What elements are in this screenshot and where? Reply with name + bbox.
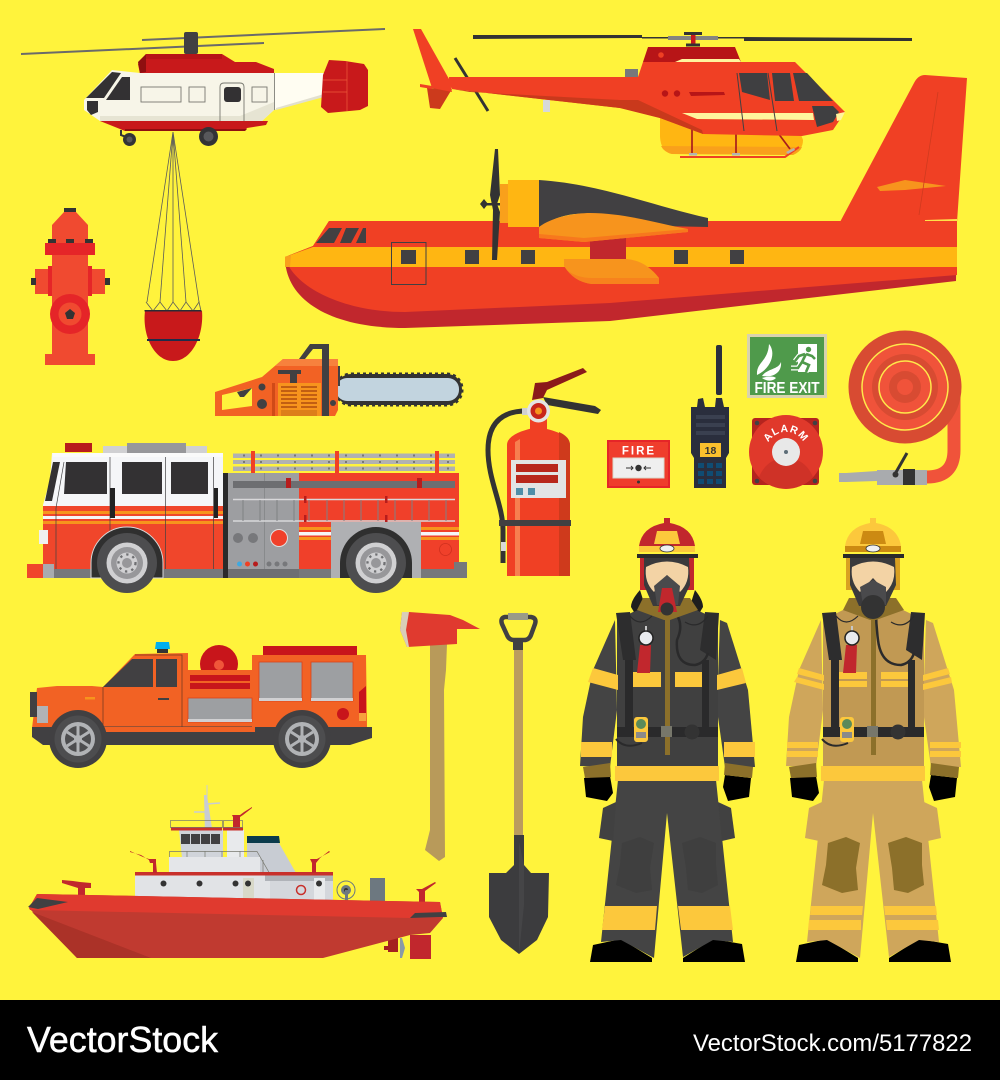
- truck rear wheel: [340, 527, 412, 593]
- fire exit sign: [747, 334, 827, 398]
- footer bar: [0, 1000, 1000, 1080]
- head and helmet: [843, 518, 904, 620]
- trousers: [599, 780, 735, 958]
- truck front wheel: [91, 527, 163, 593]
- jacket: [580, 610, 755, 781]
- icon: fire hydrant: [31, 208, 110, 365]
- icon: water bomber plane: [285, 75, 967, 328]
- sign text: FIRE EXIT: [754, 380, 820, 397]
- tail fin: [413, 29, 488, 111]
- plane hull: [285, 221, 957, 328]
- icon: pickup fire truck: [30, 642, 372, 768]
- icon: exit door and running man: [791, 344, 817, 372]
- pickup front wheel: [49, 710, 107, 768]
- icon: walkie talkie radio: [691, 345, 729, 488]
- helicopter fuselage: [84, 54, 368, 131]
- gloves: [584, 775, 751, 801]
- icon: orange helicopter: [413, 29, 912, 157]
- firefighter in tan suit with yellow helmet: [786, 518, 961, 962]
- main rotor: [473, 32, 912, 46]
- icon: leaves: [757, 344, 781, 381]
- boat rudder and propeller: [384, 935, 431, 959]
- truck cab: [27, 443, 223, 578]
- water bucket on cables: [144, 132, 202, 361]
- extinguisher hose: [488, 411, 526, 563]
- footer url: VectorStock.com/5177822: [693, 1030, 972, 1057]
- icon: white rescue helicopter with bucket line: [21, 28, 385, 361]
- pickup rear wheel: [273, 710, 331, 768]
- icon: fire engine truck: [27, 443, 467, 593]
- hose coil: [848, 330, 962, 444]
- icon: fire extinguisher: [488, 368, 601, 576]
- footer logo: VectorStock: [27, 1019, 219, 1060]
- boots: [590, 939, 745, 962]
- plane engine and wing: [500, 180, 708, 284]
- plane tail: [840, 75, 967, 222]
- icon: fire axe: [400, 612, 480, 861]
- boat deck equipment: [337, 878, 385, 903]
- chainsaw bar: [336, 374, 462, 405]
- trousers: [805, 780, 941, 958]
- pickup body: [30, 653, 372, 745]
- boat hull: [28, 894, 447, 958]
- hose nozzle: [839, 453, 927, 485]
- icon: chainsaw: [215, 344, 462, 416]
- fuselage: [449, 47, 845, 136]
- hose tail: [927, 390, 954, 477]
- breathing apparatus: [822, 610, 925, 746]
- boat superstructure: [135, 785, 333, 903]
- extinguisher cylinder: [499, 400, 571, 576]
- icon: fire boat: [28, 785, 447, 959]
- pickup top equipment: [155, 642, 357, 683]
- gloves: [790, 775, 957, 801]
- boots: [796, 939, 951, 962]
- radio display digits: 18: [705, 445, 716, 457]
- chainsaw body: [215, 344, 340, 416]
- call point label: FIRE: [622, 446, 656, 458]
- extinguisher lever handles: [532, 368, 601, 414]
- helicopter wheels: [121, 127, 218, 146]
- firefighter in dark suit with red helmet: [580, 518, 755, 962]
- icon: fire hose reel: [839, 330, 962, 485]
- truck ladder rack: [233, 451, 455, 474]
- icon: fire alarm call point: [607, 440, 670, 488]
- alarm label: ALARM: [764, 424, 808, 442]
- plane propeller: [480, 149, 500, 260]
- jacket: [786, 610, 961, 781]
- truck rear body: [223, 473, 467, 578]
- boat water cannons: [62, 807, 436, 902]
- helicopter rotor: [21, 28, 385, 55]
- icon: alarm bell: [749, 415, 823, 489]
- icon: shovel: [489, 613, 549, 954]
- head and helmet: [631, 518, 703, 620]
- breathing apparatus: [616, 608, 719, 746]
- helicopter skid and yellow pod: [660, 115, 803, 157]
